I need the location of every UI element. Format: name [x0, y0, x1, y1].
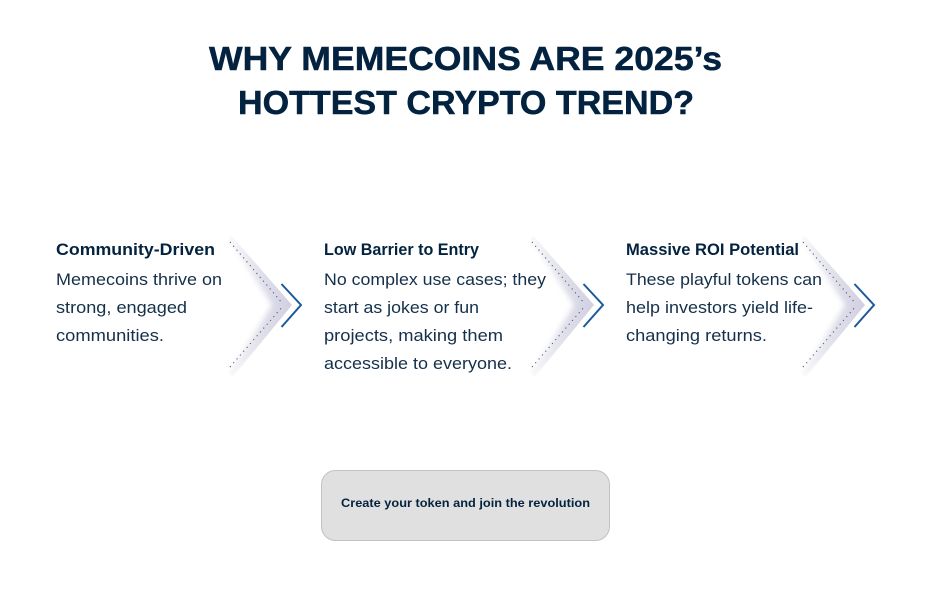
panel: community-driven — [56, 241, 222, 345]
call to action button: Create your token and join the revolution — [341, 496, 590, 510]
arrow: second chevron — [532, 240, 604, 372]
panel: community-driven: communities. — [56, 327, 164, 345]
panel: low barrier to entry — [324, 241, 547, 373]
panel: community-driven: strong, engaged — [56, 299, 187, 317]
panel: massive roi potential: These playful tokens can — [626, 271, 822, 289]
arrow: third chevron — [802, 240, 876, 372]
panel: massive roi potential — [626, 241, 822, 345]
panel: low barrier to entry: start as jokes or fun — [324, 299, 479, 317]
title: WHY MEMECOINS ARE 2025’s — [209, 40, 722, 77]
panel: massive roi potential: changing returns. — [626, 327, 767, 345]
call to action button — [322, 470, 610, 540]
panel: low barrier to entry: Low Barrier to Entry — [324, 241, 480, 259]
title — [209, 40, 722, 121]
panel: community-driven: Community-Driven — [56, 241, 215, 259]
title: HOTTEST CRYPTO TREND? — [238, 84, 694, 121]
panel: low barrier to entry: accessible to everyone. — [324, 355, 512, 373]
panel: massive roi potential: Massive ROI Potential — [626, 241, 799, 259]
panel: low barrier to entry: No complex use cases; they — [324, 271, 547, 289]
arrow: first chevron — [230, 240, 302, 372]
panel: massive roi potential: help investors yield life- — [626, 299, 813, 317]
panel: low barrier to entry: projects, making them — [324, 327, 503, 345]
panel: community-driven: Memecoins thrive on — [56, 271, 222, 289]
